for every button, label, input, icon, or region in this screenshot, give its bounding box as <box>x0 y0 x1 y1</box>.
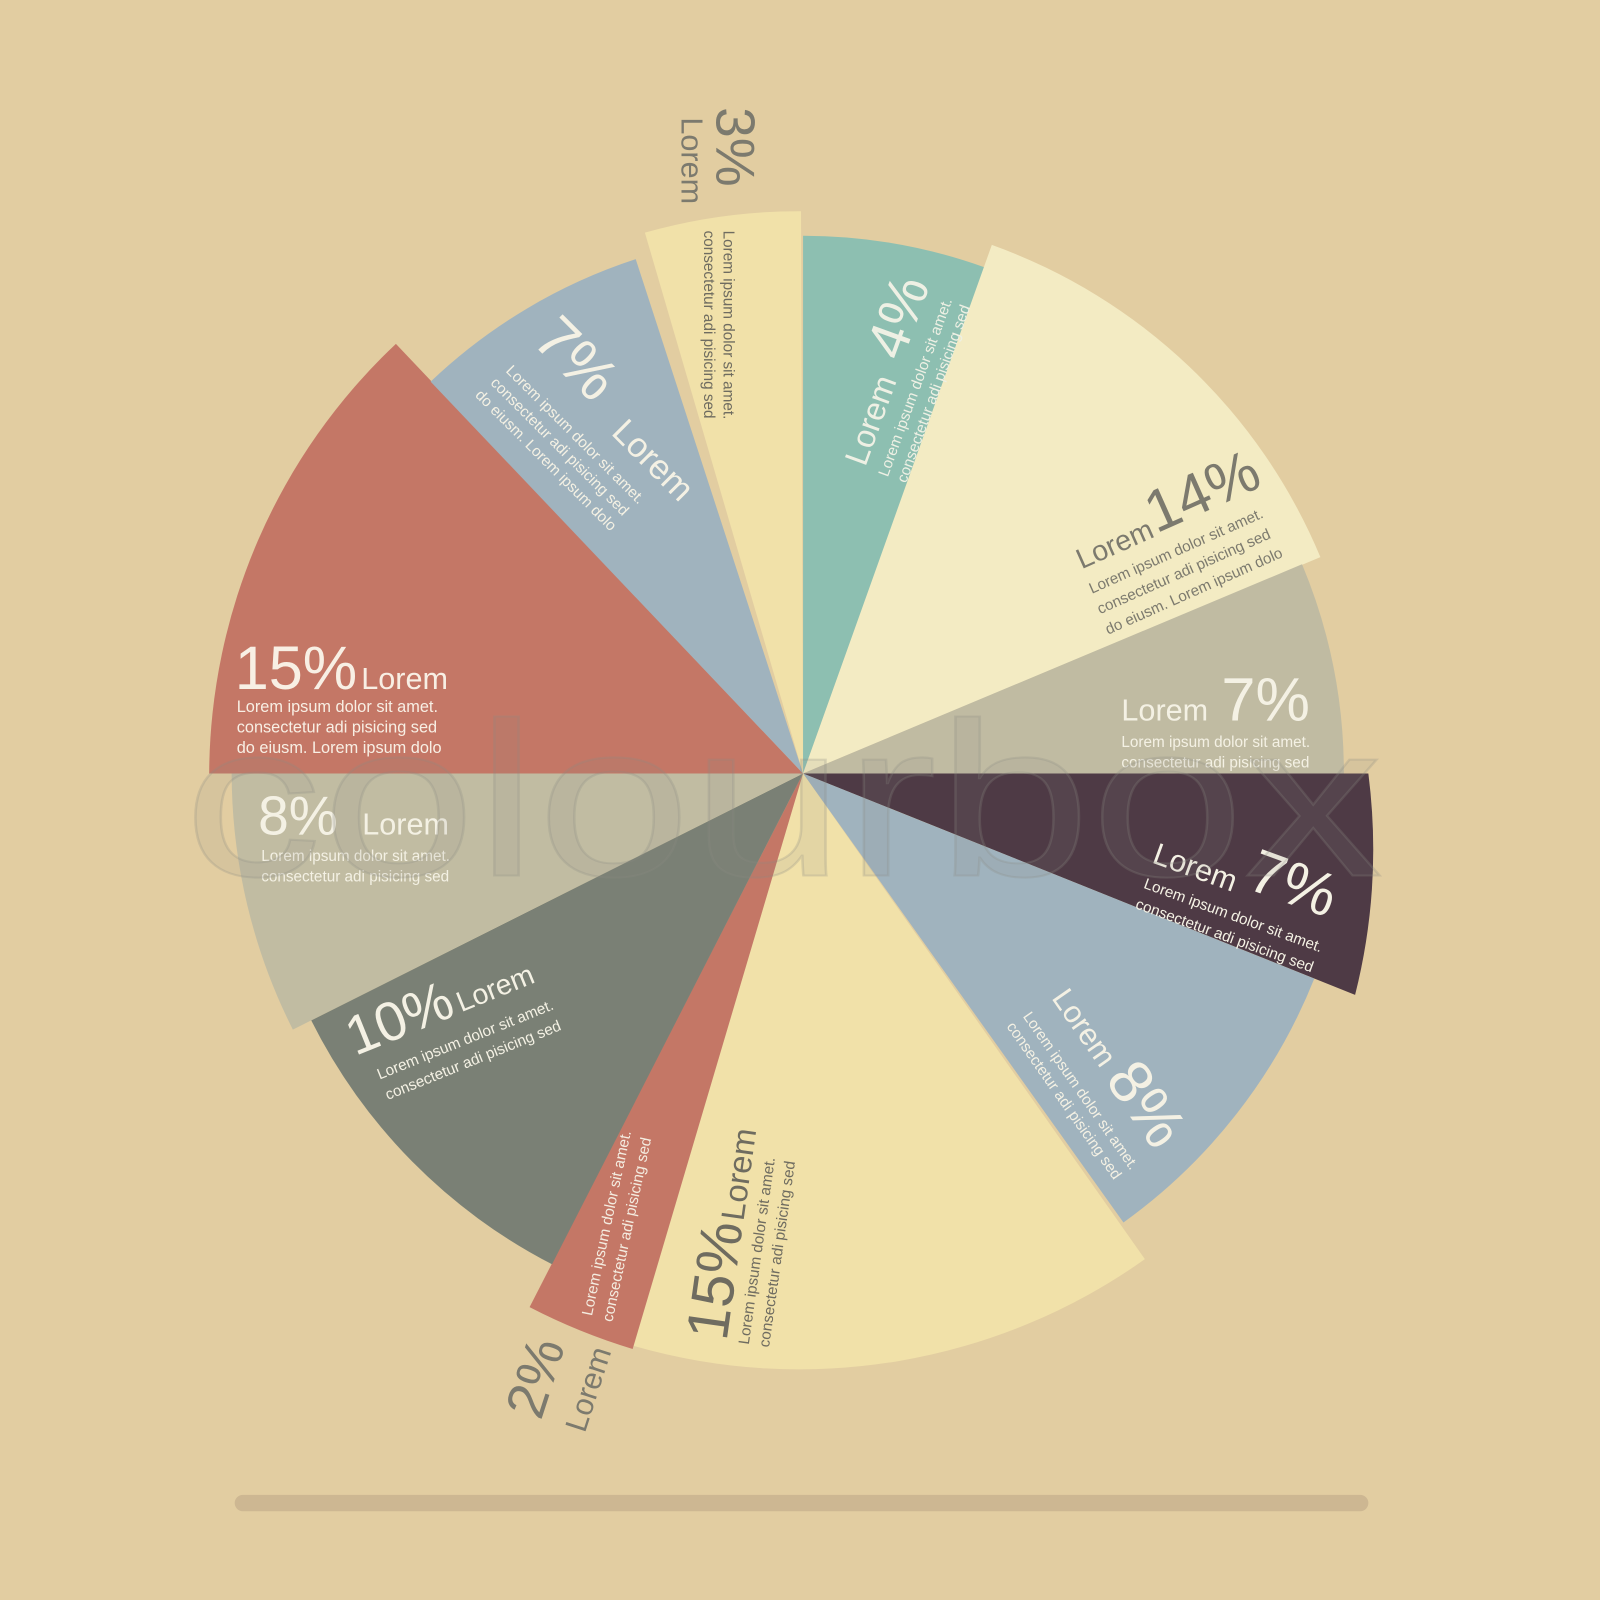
text: blue 8%: consectetur adi pisicing sed <box>1003 1019 1125 1183</box>
text: purple 7%: Lorem <box>1149 837 1242 898</box>
text: light grey 8%: 8% <box>258 785 338 847</box>
pie chart <box>209 211 1373 1369</box>
label: 2% outside <box>493 1330 618 1436</box>
text: teal 4%: Lorem <box>837 370 904 470</box>
text: teal 4%: consectetur adi pisicing sed <box>894 303 974 485</box>
text: cream 14%: 14% <box>1134 436 1270 546</box>
text: 3% body <box>700 231 736 419</box>
label: 3% outside <box>675 107 766 204</box>
label: 3% outside: 3% <box>704 107 766 187</box>
text: cream 14%: Lorem <box>1071 514 1158 576</box>
text: cream 14%: Lorem ipsum dolor sit amet. <box>1087 505 1266 598</box>
text: cream 14%: consectetur adi pisicing sed <box>1095 526 1273 618</box>
slice: blue 7% <box>431 259 803 773</box>
text: blue 7%: Lorem <box>605 412 701 509</box>
text: red 15%: consectetur adi pisicing sed <box>237 719 437 737</box>
text: light grey 8%: Lorem <box>362 808 449 842</box>
text: light grey 8%: Lorem ipsum dolor sit amet. <box>261 848 450 865</box>
label: 3% outside: Lorem <box>675 117 709 204</box>
slice: light grey 8% <box>232 773 803 1030</box>
watermark: colourbox <box>184 678 1383 923</box>
text: blue 8%: Lorem <box>1045 982 1123 1073</box>
text: blue 7%: do eiusm. Lorem ipsum dolo <box>472 387 620 535</box>
text: blue 8% <box>1003 982 1200 1183</box>
text: red 15%: 15% <box>235 634 357 702</box>
text: light grey 8%: consectetur adi pisicing sed <box>261 869 449 886</box>
text: blue 8%: Lorem ipsum dolor sit amet. <box>1019 1009 1141 1173</box>
text: cream 14%: do eiusm. Lorem ipsum dolo <box>1103 545 1285 638</box>
text: 3% body: consectetur adi pisicing sed <box>700 231 717 419</box>
text: red 15%: Lorem <box>361 662 448 696</box>
text: 3% body: Lorem ipsum dolor sit amet. <box>719 231 736 419</box>
text: dark grey 10%: Lorem <box>452 959 539 1019</box>
text: teal 4%: Lorem ipsum dolor sit amet. <box>876 296 956 479</box>
text: grey beige 7%: Lorem ipsum dolor sit amet. <box>1121 734 1310 751</box>
text: teal 4%: 4% <box>854 267 942 367</box>
text: blue 7% <box>472 303 701 535</box>
text: grey beige 7%: consectetur adi pisicing sed <box>1121 754 1309 771</box>
text: red 15%: Lorem ipsum dolor sit amet. <box>237 698 438 716</box>
slice: dark grey 10% <box>311 773 803 1264</box>
label: 2% outside: 2% <box>493 1330 577 1425</box>
text: blue 7%: Lorem ipsum dolor sit amet. <box>502 362 648 508</box>
slice: cream 3% <box>645 211 803 773</box>
text: cream 15%: 15% <box>673 1217 756 1344</box>
text: dark grey 10% <box>336 959 563 1104</box>
text: blue 7%: consectetur adi pisicing sed <box>487 374 632 519</box>
slice: teal 4% <box>803 236 985 773</box>
text: dark grey 10%: consectetur adi pisicing sed <box>383 1018 563 1104</box>
text: red 15%: do eiusm. Lorem ipsum dolo <box>237 739 442 757</box>
slice: cream 14% <box>803 245 1320 773</box>
label: 2% outside: Lorem <box>559 1343 618 1436</box>
text: cream 15%: Lorem <box>714 1126 763 1223</box>
text: purple 7%: consectetur adi pisicing sed <box>1133 896 1316 976</box>
slice: blue 8% <box>803 773 1314 1222</box>
text: dark grey 10%: 10% <box>336 968 462 1067</box>
text: cream 15%: consectetur adi pisicing sed <box>756 1160 799 1348</box>
slice: purple 7% <box>803 773 1373 995</box>
text: light grey 8% <box>258 785 450 886</box>
text: cream 14% <box>1071 436 1285 638</box>
text: cream 15%: Lorem ipsum dolor sit amet. <box>736 1156 779 1346</box>
text: grey beige 7%: Lorem <box>1121 693 1208 727</box>
text: red 15% <box>235 634 448 757</box>
text: dark grey 10%: Lorem ipsum dolor sit amet. <box>375 997 556 1083</box>
text: purple 7% <box>1133 836 1347 976</box>
slice: red 15% <box>209 344 803 773</box>
slice: grey beige 7% <box>803 564 1344 773</box>
text: cream 15% <box>673 1122 803 1348</box>
text: grey beige 7% <box>1121 665 1310 771</box>
base shadow bar <box>235 1495 1368 1511</box>
slice: red 2% <box>530 773 803 1349</box>
text: teal 4% <box>837 267 974 485</box>
text: red 2% body: Lorem ipsum dolor sit amet. <box>579 1129 635 1317</box>
text: blue 8%: 8% <box>1093 1048 1200 1160</box>
text: red 2% body: consectetur adi pisicing sed <box>600 1136 655 1323</box>
text: purple 7%: 7% <box>1240 836 1347 930</box>
slice: cream 15% <box>634 773 1145 1369</box>
text: blue 7%: 7% <box>521 303 632 414</box>
text: purple 7%: Lorem ipsum dolor sit amet. <box>1141 876 1325 956</box>
text: grey beige 7%: 7% <box>1221 665 1310 733</box>
